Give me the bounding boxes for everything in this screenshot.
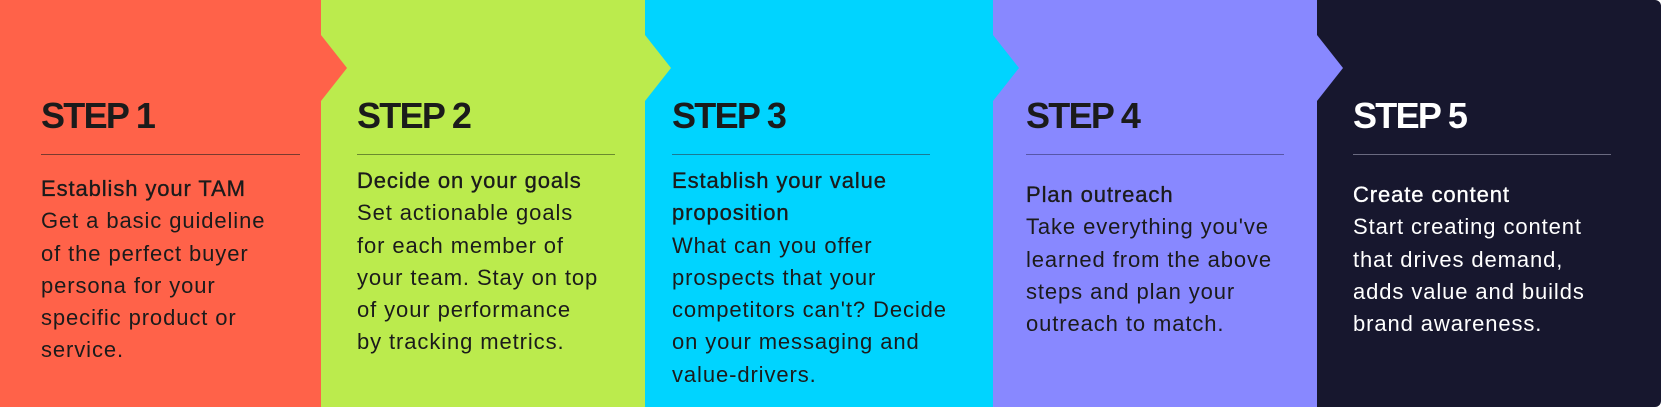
text: step 1: Establish your TAM (41, 176, 246, 201)
text: step 3: proposition (672, 200, 790, 225)
text: step 3: Establish your value (672, 168, 887, 193)
text: step 2: Decide on your goals (357, 168, 582, 193)
text: step 1: Get a basic guideline (41, 208, 265, 233)
text: step 1 (41, 176, 265, 362)
heading: step 1: STEP 1 (41, 95, 154, 136)
text: step 2: for each member of (357, 233, 564, 258)
text: step 2 (357, 168, 598, 354)
arrow: step 4 to 5 (1317, 35, 1343, 101)
text: step 1: service. (41, 337, 124, 362)
arrow: step 2 to 3 (645, 35, 671, 101)
text: step 5 (1353, 182, 1585, 336)
text: step 5: that drives demand, (1353, 247, 1563, 272)
text: step 3: prospects that your (672, 265, 876, 290)
text: step 5: Create content (1353, 182, 1510, 207)
text: step 4: Plan outreach (1026, 182, 1173, 207)
text: step 2: of your performance (357, 297, 571, 322)
text: step 5: brand awareness. (1353, 311, 1542, 336)
panel: step 1 (0, 0, 321, 407)
arrow: step 3 to 4 (993, 35, 1019, 101)
text: step 5: Start creating content (1353, 214, 1582, 239)
text: step 5: adds value and builds (1353, 279, 1585, 304)
text: step 1: persona for your (41, 273, 216, 298)
panel: step 2 (321, 0, 645, 407)
text: step 4: learned from the above (1026, 247, 1272, 272)
text: step 3: competitors can't? Decide (672, 297, 947, 322)
text: step 1: specific product or (41, 305, 237, 330)
text: step 2: by tracking metrics. (357, 329, 564, 354)
panel: step 4 (993, 0, 1317, 407)
arrow: step 1 to 2 (321, 35, 347, 101)
text: step 3 (672, 168, 947, 387)
text: step 4: Take everything you've (1026, 214, 1269, 239)
text: step 4: steps and plan your (1026, 279, 1235, 304)
panel: step 3 (645, 0, 993, 407)
heading: step 3: STEP 3 (672, 95, 785, 136)
heading: step 2: STEP 2 (357, 95, 470, 136)
text: step 1: of the perfect buyer (41, 241, 249, 266)
text: step 2: your team. Stay on top (357, 265, 598, 290)
text: step 3: What can you offer (672, 233, 872, 258)
heading: step 5: STEP 5 (1353, 95, 1466, 136)
text: step 2: Set actionable goals (357, 200, 573, 225)
text: step 3: on your messaging and (672, 329, 920, 354)
heading: step 4: STEP 4 (1026, 95, 1139, 136)
panel: step 5 (1317, 0, 1661, 407)
text: step 4: outreach to match. (1026, 311, 1224, 336)
text: step 3: value-drivers. (672, 362, 817, 387)
text: step 4 (1026, 182, 1272, 336)
